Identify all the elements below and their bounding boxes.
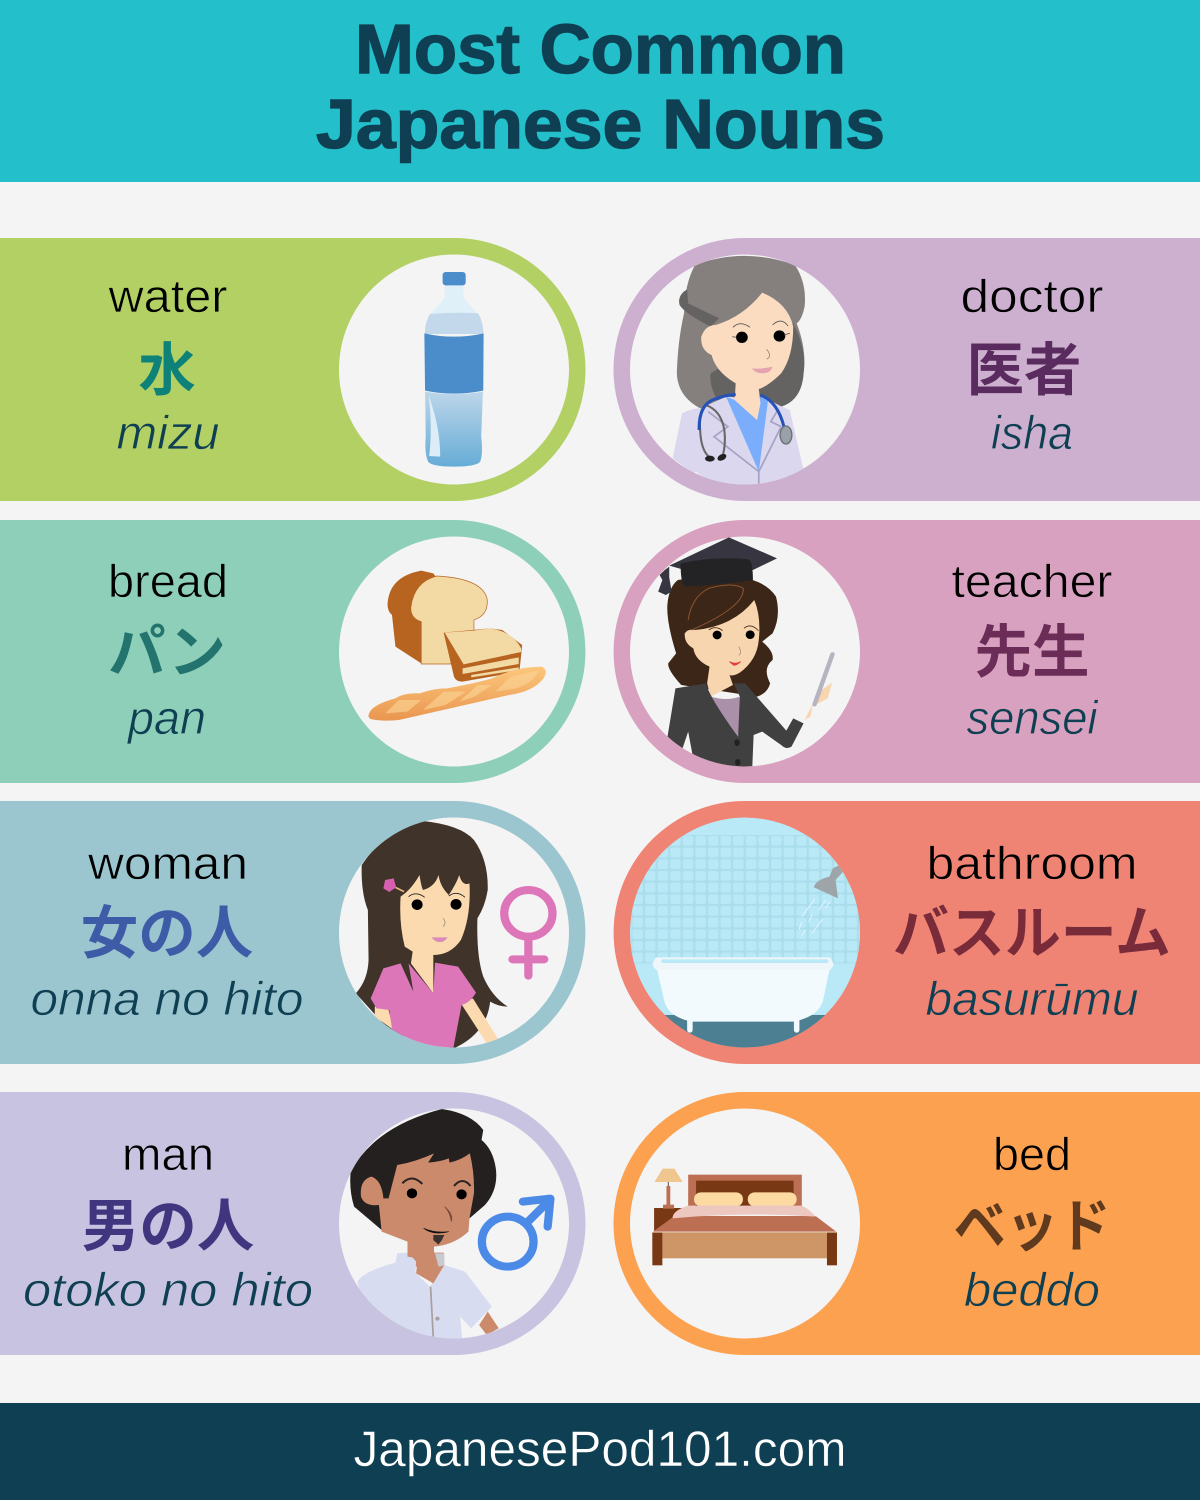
japanese word: mizu: 水 [138,339,196,403]
romaji: mizu: mizu [116,406,220,459]
romaji: sensei: sensei [966,691,1099,744]
english word: bathroom: bathroom [926,837,1138,889]
english word: doctor: doctor [960,270,1104,322]
illustration: man [350,1109,499,1340]
panel: water [0,238,586,501]
japanese word: isha: 医者 [966,339,1082,403]
title: Japanese Nouns [316,85,885,163]
title [316,10,885,163]
english word: man: man [122,1128,214,1180]
japanese word: sensei: 先生 [974,621,1090,685]
panel: bed [614,1092,1200,1355]
japanese word: onna no hito: 女の人 [81,902,253,966]
romaji: pan: pan [126,691,206,744]
footer: website: JapanesePod101.com [354,1421,846,1477]
romaji: onna no hito: onna no hito [30,972,304,1025]
illustration: teacher [658,537,832,768]
icon: bread [368,571,546,721]
english word: bread: bread [108,555,228,607]
english word: woman: woman [87,837,248,889]
panel: teacher [614,520,1200,783]
icon: female symbol [504,890,552,976]
panel: woman [0,801,585,1064]
romaji: otoko no hito: otoko no hito [23,1263,313,1316]
romaji: beddo: beddo [964,1263,1100,1316]
japanese word: otoko no hito: 男の人 [82,1195,254,1259]
header banner [0,0,1200,182]
illustration: doctor [673,256,805,487]
japanese word: pan: パン [108,621,226,685]
footer: website [0,1403,1200,1500]
icon: water bottle [424,272,484,467]
illustration: bathroom [630,818,860,1048]
icon: bed and lamp [652,1169,837,1265]
illustration: woman [356,821,508,1048]
panel: bread [0,520,585,783]
english word: water: water [107,270,228,322]
icon: graduation cap [658,537,777,595]
icon: male symbol [482,1199,550,1267]
title: Most Common [355,10,846,88]
panel: man [0,1092,586,1355]
romaji: isha: isha [991,406,1073,459]
romaji: basurumu: basurūmu [926,972,1138,1025]
japanese word: beddo: ベッド [954,1195,1110,1259]
english word: bed: bed [993,1128,1071,1180]
panel: bathroom [614,801,1200,1064]
japanese word: basurumu: バスルーム [893,902,1171,966]
english word: teacher: teacher [952,555,1112,607]
panel: doctor [614,238,1200,501]
